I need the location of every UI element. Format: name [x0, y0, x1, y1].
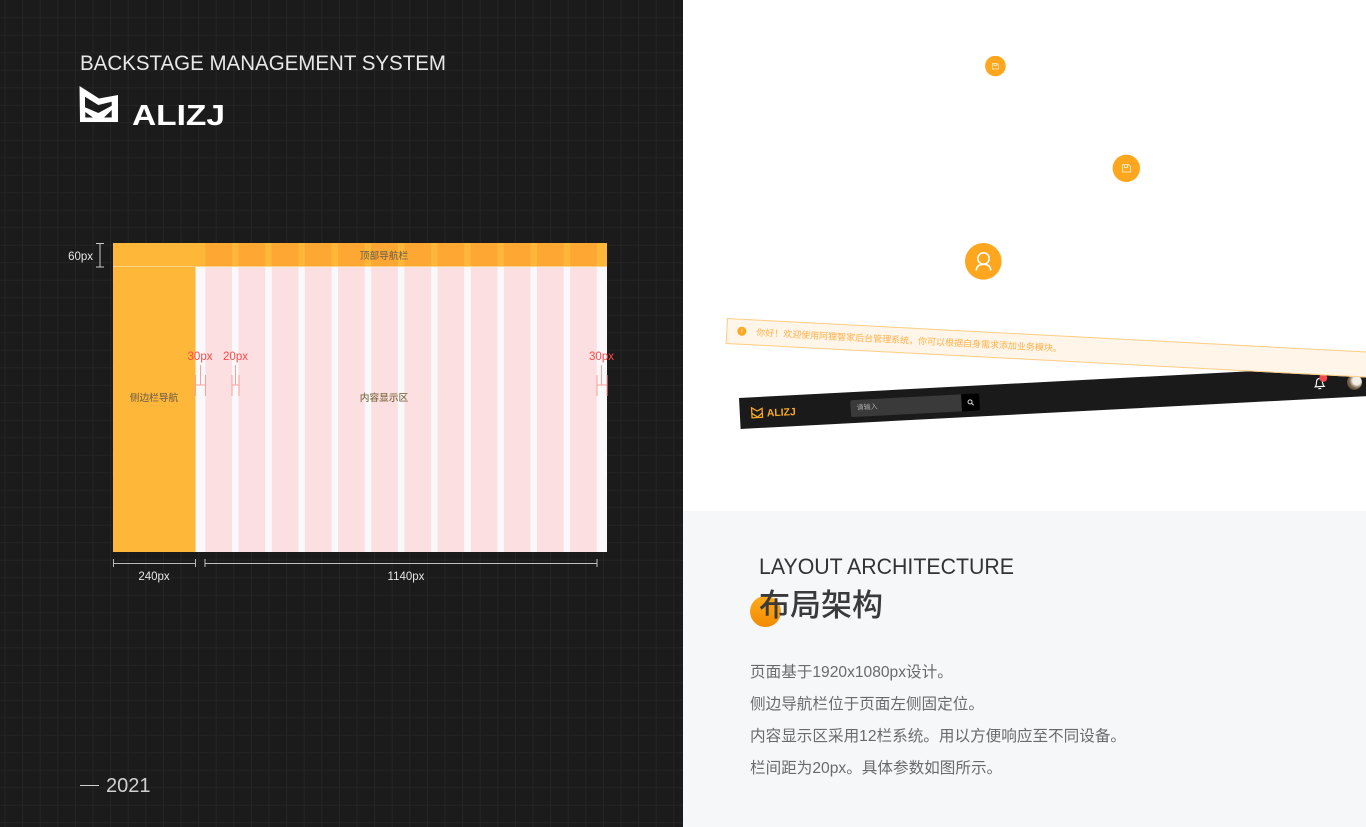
diagram labels: 内容显示区 — [360, 391, 409, 404]
alert info icon — [737, 327, 747, 336]
red gutter annotations: 30px — [188, 351, 213, 363]
dimension: 1140px: 1140px — [388, 571, 425, 583]
dimension: 240px — [114, 559, 196, 583]
description text: 栏间距为20px。具体参数如图所示。 — [750, 760, 1002, 777]
year label: 2021 — [106, 775, 150, 797]
mini logo — [750, 406, 796, 420]
red gutter annotations — [188, 351, 614, 363]
description text: 页面基于1920x1080px设计。 — [750, 664, 953, 681]
panel: description background — [683, 511, 1366, 827]
description text: 内容显示区采用12栏系统。用以方便响应至不同设备。 — [750, 728, 1126, 745]
mini logo: ALIZJ — [767, 406, 796, 420]
tilted welcome alert banner — [726, 318, 1366, 380]
top navigation bar — [113, 243, 607, 266]
user avatar — [1347, 374, 1362, 390]
panel: dark left background with grid — [0, 0, 683, 827]
icon: medium save button — [1112, 154, 1140, 182]
decorative orange circle — [750, 596, 781, 627]
red gutter annotations: 20px — [223, 351, 248, 363]
logo: ALIZJ — [80, 86, 225, 130]
heading: chinese title: 布局架构 — [759, 580, 883, 625]
diagram labels: 顶部导航栏 — [360, 249, 409, 262]
heading: layout architecture: LAYOUT ARCHITECTURE — [759, 554, 1014, 579]
icon: user avatar button — [965, 243, 1002, 280]
red gutter annotations: 30px — [589, 351, 614, 363]
diagram labels — [130, 249, 409, 404]
dimension: 60px: 60px — [68, 251, 93, 263]
description text: 侧边导航栏位于页面左侧固定位。 — [750, 696, 984, 713]
diagram labels: 侧边栏导航 — [130, 391, 179, 404]
twelve column grid — [205, 243, 597, 552]
search input: 请输入 — [857, 404, 878, 412]
search input — [850, 394, 962, 417]
tilted top navigation bar mockup — [739, 362, 1366, 429]
alert info icon: i — [741, 328, 743, 335]
dimension: 240px: 240px — [138, 571, 170, 583]
icon: small save button — [985, 56, 1006, 76]
sidebar — [113, 243, 196, 552]
dimension: 60px — [68, 244, 104, 267]
layout diagram — [68, 243, 614, 583]
alert message: 你好！欢迎使用阿狸智家后台管理系统，你可以根据自身需求添加业务模块。 — [756, 328, 1062, 354]
heading: backstage management system: BACKSTAGE MANAGEMENT SYSTEM — [80, 52, 446, 75]
notification bell — [1314, 375, 1328, 390]
description text — [750, 664, 1126, 777]
search button — [961, 393, 980, 411]
dimension: 1140px — [205, 559, 597, 583]
icon: M mark — [80, 86, 118, 122]
content area background — [113, 243, 607, 552]
